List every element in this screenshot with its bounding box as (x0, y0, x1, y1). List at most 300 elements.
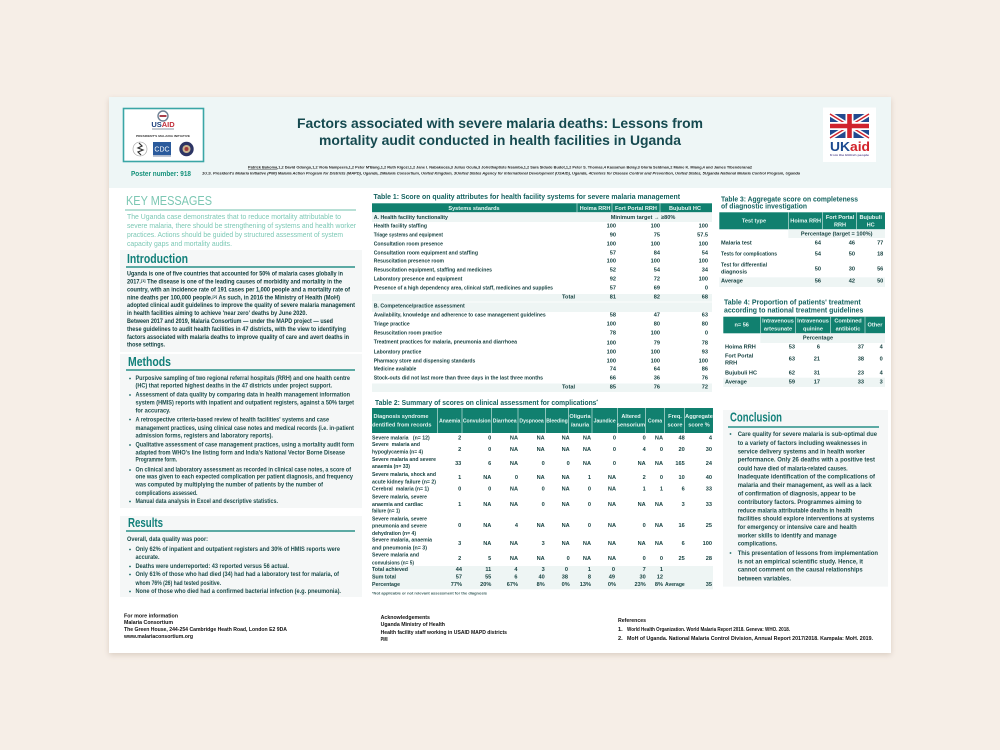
table 2: clinical assessment: Cerebral malaria (n= 1) (372, 487, 429, 493)
table 2: clinical assessment: 1 (588, 475, 591, 481)
table 1: quality attributes: 68 (702, 294, 708, 300)
table 1: quality attributes: 0 (705, 285, 708, 291)
table 2: clinical assessment: 12 (657, 574, 663, 580)
table 2: clinical assessment: 24 (706, 461, 713, 467)
table 2: clinical assessment: 77% (451, 582, 462, 588)
table 1: quality attributes: 100 (607, 349, 616, 355)
table 2: clinical assessment: NA (608, 475, 616, 481)
table 2: clinical assessment: NA (510, 556, 518, 562)
table 4: treatment guidelines: Percentage (803, 336, 833, 342)
table 2: clinical assessment: 0 (588, 523, 591, 529)
table 1: quality attributes: 100 (651, 259, 660, 265)
table 2: clinical assessment: 28 (706, 556, 712, 562)
table 2: clinical assessment: 3 (542, 567, 545, 573)
table 2: clinical assessment: 0 (613, 461, 616, 467)
table 2: clinical assessment: NA (562, 502, 570, 508)
table 1: quality attributes: 100 (607, 223, 616, 229)
table 2: clinical assessment: NA (638, 502, 646, 508)
list: results bullets: Only 61% of those who had died (34) had had a laboratory test for malaria, of (136, 572, 340, 578)
table 4: treatment guidelines: 4 (880, 371, 884, 377)
table 1: quality attributes: 90 (610, 232, 616, 238)
footer: more information: The Green House, 244-254 Cambridge Heath Road, London E2 9DA (124, 627, 287, 633)
text: conclusion bullets: of confirmation of diagnosis, appear to be (738, 491, 856, 497)
table 2: clinical assessment: NA (510, 461, 518, 467)
footer: references: World Health Organization. World Malaria Report 2018. Geneva: WHO. 2018. (627, 627, 790, 633)
table 1: quality attributes: 72 (654, 277, 660, 283)
text: introduction body: The disease is one of the leading causes of morbidity and mortality in the (146, 280, 343, 286)
table 2 header (371, 408, 713, 433)
table 2: clinical assessment: 0 (612, 567, 615, 573)
table 2: clinical assessment: NA (537, 475, 545, 481)
table 4: treatment guidelines (723, 297, 885, 387)
table 1: quality attributes: 92 (610, 277, 616, 283)
table 1: quality attributes: 79 (654, 341, 660, 347)
table 2: clinical assessment: 7 (643, 567, 646, 573)
table 2: clinical assessment: 10 (678, 475, 685, 481)
table 2: clinical assessment: 0 (643, 523, 646, 529)
table 3 header: Hoima RRH (790, 219, 821, 225)
table 3: diagnostic investigation: 18 (877, 252, 883, 258)
table 4 header: artesunate (764, 327, 792, 333)
table 2: clinical assessment: 16 (678, 523, 685, 529)
table 2: clinical assessment: 4 (515, 523, 519, 529)
table 4: treatment guidelines: Fort Portal (725, 354, 754, 360)
list: methods bullets: Purposive sampling of two regional referral hospitals (RRH) and one health centre (136, 376, 351, 382)
table 2: clinical assessment: 44 (456, 567, 463, 573)
table 1: quality attributes: 76 (654, 384, 660, 390)
list: results bullets: whom 76% (26) had tested positive. (135, 581, 221, 587)
list: methods bullets: admission forms, registers and laboratory reports). (136, 434, 273, 440)
table 2: clinical assessment: 40 (706, 475, 712, 481)
table 1: quality attributes: 57 (610, 250, 616, 256)
table 2: clinical assessment: 2 (643, 475, 646, 481)
table 2: clinical assessment: 49 (609, 574, 615, 580)
table 2: clinical assessment: Severe malaria and (372, 442, 421, 448)
table 3: diagnostic investigation: 56 (877, 266, 883, 272)
list: methods bullets: complications assessed. (136, 491, 198, 497)
table 2: clinical assessment: NA (562, 523, 570, 529)
table 2: clinical assessment: Average (665, 582, 685, 588)
table 2: clinical assessment: 0 (567, 461, 570, 467)
table 4 header: Intravenous (762, 319, 794, 325)
table 2: clinical assessment: Severe malaria (n= 12) (372, 435, 430, 441)
table 4 header: quinine (803, 327, 823, 333)
text: introduction body: As such, in 2016 the Ministry of Health (MoH) (217, 295, 340, 301)
table 1: quality attributes: 100 (607, 322, 616, 328)
table 2: clinical assessment: NA (655, 461, 663, 467)
table 3 title (721, 195, 858, 210)
logo box: USAID: USAID (151, 120, 175, 129)
list: results bullets: Deaths were underreported: 43 reported versus 56 actual. (136, 564, 289, 570)
table 1: quality attributes: 100 (607, 358, 616, 364)
table 2: clinical assessment: NA (655, 541, 663, 547)
table 2: clinical assessment: 0 (588, 487, 591, 493)
table 2: clinical assessment: NA (510, 487, 518, 493)
text: conclusion bullets (730, 432, 878, 583)
table 1: quality attributes: 57 (610, 285, 616, 291)
table 2: clinical assessment: 1 (458, 502, 461, 508)
table 4: treatment guidelines: 3 (880, 380, 883, 386)
table 4: treatment guidelines: 33 (858, 380, 864, 386)
list: methods bullets: adapted from WHO's line listing form and India's National Vector Borne Disease (136, 451, 346, 457)
table 2 title: * (596, 398, 598, 404)
table 1: quality attributes: 63 (702, 313, 708, 319)
text: conclusion bullets: worker skills to identify and manage (737, 533, 837, 539)
table 1: quality attributes: 85 (610, 384, 616, 390)
table 1: quality attributes: Resuscitation equipment, staffing and medicines (374, 268, 492, 274)
text: key messages body: severe malaria, there should be strengthening of systems and health worker (127, 221, 357, 230)
table 3 header: Bujubuli (860, 215, 882, 221)
table 2: clinical assessment: 100 (703, 541, 712, 547)
footer: references (618, 618, 873, 642)
table 2 header: /anuria (571, 423, 590, 429)
table 3: diagnostic investigation: 42 (849, 279, 855, 285)
table 2: clinical assessment: 40 (538, 574, 545, 580)
table 1: quality attributes: Triage practice (374, 322, 410, 328)
table 3: diagnostic investigation: 50 (877, 279, 883, 285)
footer: acknowledgements: Uganda Ministry of Health (381, 622, 446, 628)
table 2: clinical assessment: NA (583, 556, 591, 562)
text: key messages body: capacity gaps and mortality audits. (127, 239, 232, 248)
table 4: treatment guidelines: Average (725, 380, 747, 386)
table 3: diagnostic investigation: 56 (815, 279, 821, 285)
table 4 header: antibiotic (836, 327, 860, 333)
footer: acknowledgements: Health facility staff working in USAID MAPD districts (381, 630, 507, 636)
table 2: clinical assessment: 1 (660, 487, 663, 493)
table 1: quality attributes: 100 (651, 223, 660, 229)
table 2: clinical assessment: anaemia (n= 33) (372, 464, 410, 470)
table 2: clinical assessment: 2 (458, 556, 461, 562)
table 2: clinical assessment: 165 (675, 461, 685, 467)
table 2 header: Freq. (668, 414, 682, 420)
table 4: treatment guidelines: Bujubuli HC (725, 371, 757, 377)
text: introduction body: those settings. (127, 343, 165, 349)
list: results bullets: None of those who died had a confirmed bacterial infection (e.g. pneumonia). (136, 589, 341, 595)
table 2 header: Coma (648, 419, 662, 425)
title: Factors associated with severe malaria deaths: Lessons from (297, 115, 703, 131)
table 1: quality attributes: Presence of a high dependency area, clinical staff, medicines and supplies (374, 285, 553, 291)
table 4: treatment guidelines: 17 (814, 380, 820, 386)
table 4: treatment guidelines: 62 (789, 371, 795, 377)
table 1: quality attributes: 93 (702, 349, 708, 355)
table 2: clinical assessment: 2 (458, 447, 461, 453)
table 2: clinical assessment: 0 (643, 556, 646, 562)
table 2: clinical assessment: NA (655, 523, 663, 529)
table 2: clinical assessment: 25 (706, 523, 712, 529)
text: conclusion bullets: This presentation of lessons from implementation (738, 551, 878, 557)
table 2 header: score % (688, 423, 710, 429)
text: introduction body: factors associated with malaria deaths to improve quality of care and avert deaths in (127, 335, 349, 341)
table 1: quality attributes: 66 (610, 375, 616, 381)
authors and affiliations (202, 166, 800, 176)
table 4: treatment guidelines: RRH (725, 361, 737, 367)
table 3: diagnostic investigation: diagnosis (721, 270, 747, 276)
text: introduction body: Uganda is one of five countries that accounted for 50% of malaria cases globally in (127, 272, 343, 278)
table 2: clinical assessment: 20 (678, 447, 685, 453)
table 2: clinical assessment: 2 (458, 435, 461, 441)
table 2: clinical assessment: 33 (455, 461, 461, 467)
table 4: treatment guidelines: 53 (789, 345, 795, 351)
table 1: quality attributes: Consultation room equipment and staffing (374, 250, 479, 256)
table 2: clinical assessment: Severe malaria, severe (372, 494, 427, 500)
logo box: USAID: CDC (154, 146, 170, 154)
table 2: clinical assessment: NA (537, 435, 545, 441)
table 1 title: Table 1: Score on quality attributes for health facility systems for severe malaria management (374, 192, 680, 201)
table 1: quality attributes: 100 (699, 277, 708, 283)
text: conclusion bullets: could have died of malaria-related causes. (738, 466, 848, 472)
text: conclusion bullets: reduce malaria attributable deaths in health (738, 508, 853, 514)
logo box: USAID: PRESIDENT'S MALARIA INITIATIVE (136, 134, 190, 138)
table 2: clinical assessment: NA (483, 502, 491, 508)
table 2: clinical assessment: convulsions (n= 5) (372, 560, 414, 566)
table 4 header: Other (868, 323, 883, 329)
table 2: clinical assessment: NA (537, 447, 545, 453)
text: introduction body: Between 2017 and 2019, Malaria Consortium — under the MAPD project — used (127, 319, 333, 325)
table 2: clinical assessment: dehydration (n= 4) (372, 531, 416, 537)
table 2: clinical assessment: NA (562, 541, 570, 547)
table 2: clinical assessment: NA (583, 461, 591, 467)
table 1: quality attributes: Consultation room presence (374, 242, 443, 248)
footer: more information: For more information (124, 614, 179, 620)
list: methods bullets: Qualitative assessment of case management practices, using a mortality audit form (136, 443, 354, 449)
footer: more information (123, 614, 287, 640)
list: methods bullets: system (HMIS) reports with inpatient and outpatient registers, against a 50% target (136, 400, 354, 406)
table 2: clinical assessment: 0 (458, 523, 461, 529)
footer: references: References (618, 618, 646, 624)
table 1: quality attributes: Total (562, 294, 575, 300)
logo: UK aid: from the British people (830, 153, 870, 157)
list: methods bullets: (HC) that reported highest deaths in the 47 districts under project support. (136, 384, 332, 390)
table 2: clinical assessment: 0 (488, 435, 491, 441)
table 3 header: HC (867, 223, 875, 229)
table 2: clinical assessment: 3 (458, 541, 461, 547)
table 2: clinical assessment: Severe malaria and (372, 553, 420, 559)
table 3: diagnostic investigation: 50 (849, 252, 855, 258)
table 2 header: Convulsion (463, 419, 491, 425)
table 2: clinical assessment: 8% (537, 582, 545, 588)
table 2: clinical assessment: NA (608, 502, 616, 508)
table 2: clinical assessment: 0 (542, 502, 545, 508)
table 4 header: Intravenous (797, 319, 829, 325)
table 1: quality attributes: Health facility staffing (374, 223, 428, 229)
table 2: clinical assessment: NA (608, 523, 616, 529)
table 1: quality attributes: 81 (610, 294, 616, 300)
panel: key messages (125, 193, 357, 248)
table 1: quality attributes: 69 (654, 285, 660, 291)
table 2: clinical assessment: 38 (562, 574, 568, 580)
table 2: clinical assessment: 0 (660, 447, 663, 453)
table 4: treatment guidelines: 63 (789, 357, 795, 363)
table 2: clinical assessment: Sum total (372, 574, 396, 580)
table 1: quality attributes: 100 (607, 242, 616, 248)
text: key messages body: practices. Actions should be guided by structured assessment of system (127, 230, 343, 239)
table 2: clinical assessment: 13% (580, 582, 591, 588)
table 2: clinical assessment: NA (562, 447, 570, 453)
list: methods bullets: one was given to each expected complication per patient diagnosis, and frequency (136, 475, 354, 481)
footer: references: 2. (618, 636, 623, 642)
table 2: clinical assessment: Percentage (372, 582, 400, 588)
table 2: clinical assessment: 0 (542, 461, 545, 467)
table 2: clinical assessment: 0 (613, 435, 616, 441)
table 2: clinical assessment: 35 (706, 582, 712, 588)
footer: more information: Malaria Consortium (124, 620, 173, 626)
table 2: clinical assessment: NA (608, 556, 616, 562)
table 1: quality attributes: B. Competence/practice assessment (374, 304, 465, 310)
list: methods bullets (129, 376, 354, 505)
text: introduction body: in health facilities aiming to achieve 'near zero' deaths by June 2020. (127, 311, 307, 317)
table 2: clinical assessment: 67% (507, 582, 518, 588)
table 2: clinical assessment: NA (483, 541, 491, 547)
panel: methods (120, 354, 362, 508)
table 1: quality attributes: Medicine available (374, 366, 416, 372)
table 2: clinical assessment: NA (583, 447, 591, 453)
text: key messages body: The Uganda case demonstrates that to reduce mortality attributable to (127, 212, 341, 221)
table 4 header (723, 317, 885, 333)
table 1 header (372, 203, 712, 212)
table 1: quality attributes: 72 (702, 384, 708, 390)
table 2: clinical assessment: 6 (488, 461, 491, 467)
table 1: quality attributes: 78 (610, 331, 616, 337)
table 4 header: n= 56 (734, 323, 749, 329)
table 2: clinical assessment: pneumonia and severe (372, 524, 427, 530)
table 4: treatment guidelines: 23 (858, 371, 864, 377)
text: conclusion bullets: service delivery systems and in health worker (738, 449, 866, 455)
table 1: quality attributes: Pharmacy store and dispensing standards (374, 358, 475, 364)
text: introduction body: nine deaths per 100,000 people. (127, 295, 217, 301)
text: conclusion bullets: is not an empirical scientific study. Hence, it (738, 559, 863, 565)
table 3: diagnostic investigation: 54 (815, 252, 822, 258)
text: introduction body (127, 272, 355, 349)
table 2 header: Oliguria (569, 414, 591, 420)
text: introduction body: [2] (213, 294, 218, 299)
table 1: quality attributes: 52 (610, 268, 616, 274)
table 2: clinical assessment: 0 (643, 435, 646, 441)
list: methods bullets: Manual data analysis in Excel and descriptive statistics. (136, 499, 278, 505)
table 1: quality attributes: Minimum target → ≥80% (611, 215, 675, 221)
table 2: clinical assessment: 6 (682, 487, 685, 493)
list: methods bullets: Programme form. (136, 458, 177, 464)
table 2: clinical assessment: Severe malaria, severe (372, 517, 427, 523)
table 1 header: Hoima RRH (580, 206, 610, 212)
table 1: quality attributes: 76 (702, 375, 708, 381)
table 2: clinical assessment: Severe malaria, anaemia (372, 538, 433, 544)
table 1: quality attributes: 57.5 (697, 232, 708, 238)
table 2: clinical assessment: 30 (706, 447, 712, 453)
table 1: quality attributes: Resuscitation room practice (374, 331, 442, 337)
table 2: clinical assessment: 25 (678, 556, 685, 562)
table 2: clinical assessment: NA (483, 475, 491, 481)
heading: key messages: KEY MESSAGES (126, 193, 212, 208)
table 1: quality attributes: Laboratory presence and equipment (374, 277, 462, 283)
footer: more information: www.malariaconsortium.org (123, 634, 194, 640)
table 2: clinical assessment: 33 (706, 502, 712, 508)
table 2: clinical assessment: 6 (514, 574, 518, 580)
table 1: quality attributes: 100 (607, 341, 616, 347)
table 4: treatment guidelines: 37 (858, 345, 864, 351)
table 2 title: Table 2: Summary of scores on clinical assessment for complications (375, 398, 619, 407)
table 2: clinical assessment: 0% (608, 582, 616, 588)
table 1: quality attributes: 75 (654, 232, 660, 238)
heading: methods: Methods (128, 354, 171, 369)
table 1: quality attributes: 36 (654, 375, 660, 381)
table 2 header: Jaundice (594, 419, 616, 425)
table 2: clinical assessment: 30 (639, 574, 646, 580)
table 2 header: sensorium (617, 423, 645, 429)
text: conclusion bullets: complications. (738, 542, 778, 548)
table 1: quality attributes: 86 (702, 366, 708, 372)
table 3: diagnostic investigation: 30 (849, 266, 855, 272)
table 1: quality attributes: Availability, knowledge and adherence to case management guidelines (374, 313, 546, 319)
table 2: clinical assessment: and pneumonia (n= 3) (372, 545, 427, 551)
table 2 header: Dyspnoea (519, 419, 544, 425)
table 2: clinical assessment: 4 (514, 567, 518, 573)
panel: introduction (120, 250, 362, 352)
table 2: clinical assessment: NA (510, 435, 518, 441)
table 2: clinical assessment: NA (537, 556, 545, 562)
table 2: clinical assessment: 4 (643, 447, 647, 453)
table 2: clinical assessment: anaemia and cardiac (372, 502, 423, 508)
text: conclusion bullets: malaria and their management, as well as a lack (738, 483, 872, 489)
table 1: quality attributes: 100 (651, 358, 660, 364)
table 2: clinical assessment: 11 (485, 567, 491, 573)
table 3 header: Fort Portal (826, 215, 855, 221)
table 1: quality attributes: 74 (610, 366, 617, 372)
table 2 header: Anaemia (439, 419, 460, 425)
table 4: treatment guidelines: 31 (814, 371, 820, 377)
table 2: clinical assessment: 0 (660, 475, 663, 481)
table 2: clinical assessment: 3 (542, 541, 545, 547)
table 2: clinical assessment: NA (655, 435, 663, 441)
table 1: quality attributes: 100 (699, 242, 708, 248)
table 2: clinical assessment: NA (562, 475, 570, 481)
table 3: diagnostic investigation (719, 195, 885, 287)
list: results bullets: Overall, data quality was poor: (127, 537, 208, 543)
table 1: quality attributes: 58 (610, 313, 616, 319)
table 4 header: Combined (834, 319, 862, 325)
text: key messages body (127, 212, 357, 248)
text: introduction body: these guidelines to audit health facilities in 47 districts, with the view to identifying (127, 327, 346, 333)
table 2: clinical assessment: NA (608, 487, 616, 493)
list: methods bullets: was computed by multiplying the number of patients by the number of (135, 483, 324, 489)
logo: UK aid (823, 108, 876, 162)
table 1: quality attributes: 47 (654, 313, 660, 319)
table 2: clinical assessment: NA (510, 541, 518, 547)
table 2: clinical assessment: NA (510, 447, 518, 453)
table 4: treatment guidelines: 59 (789, 380, 795, 386)
text: introduction body: country, with an incidence rate of 191 cases per 1,000 people and a mortality rate of (127, 287, 351, 293)
text: conclusion bullets: cannot comment on the causal relationships (738, 568, 863, 574)
text: introduction body: 2017. (127, 280, 142, 286)
table 4 title: Table 4: Proportion of patients' treatment (724, 297, 861, 306)
table 2 footnote: *Not applicable or not relevant assessment for the diagnosis (372, 592, 487, 596)
table 1: quality attributes: 64 (654, 366, 661, 372)
table 1: quality attributes: 54 (654, 268, 661, 274)
table 2: clinical assessment: 0 (542, 487, 545, 493)
table 1: quality attributes: 80 (702, 322, 708, 328)
table 2: clinical assessment: 20% (480, 582, 491, 588)
list: methods bullets: On clinical and laboratory assessment as recorded in clinical case notes, a score of (136, 468, 352, 474)
text: conclusion bullets: contributory factors. Programmes aiming to (738, 500, 862, 506)
footer: acknowledgements: PMI (381, 637, 388, 643)
table 2: clinical assessment: 0 (567, 556, 570, 562)
table 1: quality attributes: 100 (699, 358, 708, 364)
table 2 header: Bleeding (546, 419, 568, 425)
table 1: quality attributes: 80 (654, 322, 660, 328)
table 2 header: score (668, 423, 682, 429)
title: mortality audit conducted in health facilities in Uganda (319, 132, 681, 148)
heading: conclusion: Conclusion (730, 410, 782, 425)
table 1: quality attributes (372, 192, 712, 392)
